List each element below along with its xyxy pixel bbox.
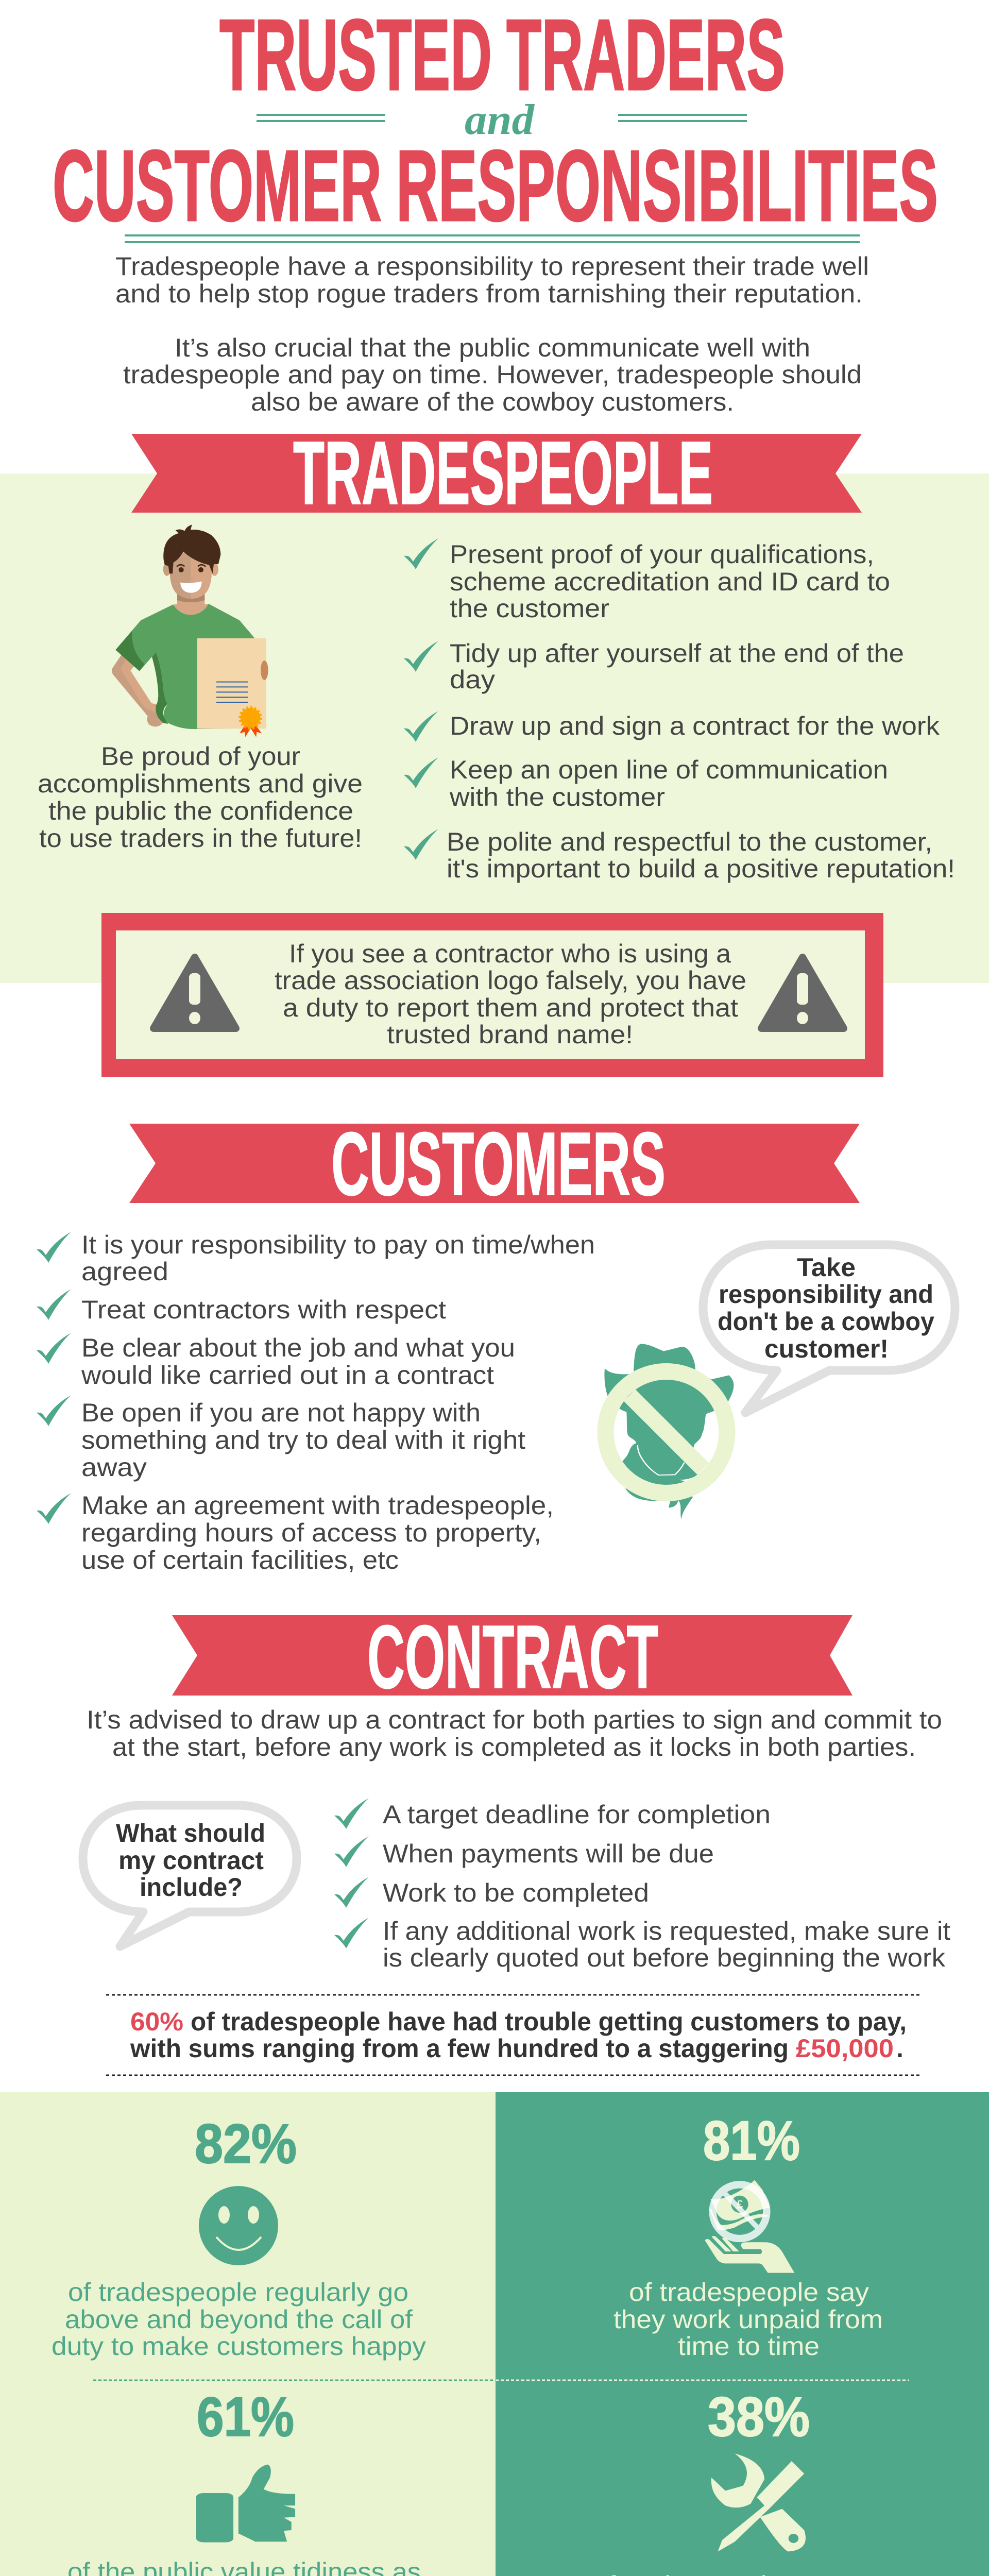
checklist: contract contents: If any additional work is requested, make sure it <box>383 1917 950 1945</box>
checklist: tradespeople duties: Be polite and respectful to the customer, <box>447 827 932 856</box>
checklist: customer responsibilities: would like carried out in a contract <box>81 1361 494 1389</box>
speech bubble: take responsibility: customer! <box>764 1334 889 1363</box>
banner: contract: CONTRACT <box>367 1606 658 1707</box>
icon: tradesman holding certificate <box>112 524 268 737</box>
callout: 60% payment statistic <box>130 2007 907 2063</box>
checklist: customer responsibilities: Treat contractors with respect <box>81 1295 446 1324</box>
intro text: Tradespeople have a responsibility to represent their trade well <box>115 252 869 281</box>
title: TRUSTED <box>219 0 492 111</box>
banner: contract <box>172 1606 852 1707</box>
stat: 38%: 38% <box>708 2385 810 2448</box>
intro text: It’s also crucial that the public communicate well with <box>175 333 810 362</box>
stat: 82%: 82% <box>195 2112 297 2175</box>
stat: 81%: 81% <box>703 2109 800 2172</box>
title: CUSTOMER <box>53 129 382 242</box>
checklist: contract contents: A target deadline for completion <box>383 1800 771 1829</box>
icon: crossed-out cowboy <box>604 1344 734 1519</box>
stat: 81%: they work unpaid from <box>613 2305 883 2334</box>
stat: 82%: duty to make customers happy <box>52 2332 426 2361</box>
speech bubble: what should my contract include: What should <box>116 1819 265 1848</box>
callout: report false logos <box>101 913 883 1077</box>
text: be proud caption: accomplishments and give <box>38 769 363 798</box>
banner: tradespeople <box>131 422 862 523</box>
title: TRADERS <box>506 0 785 111</box>
text: be proud caption: to use traders in the future! <box>39 824 362 853</box>
banner: customers <box>129 1113 860 1214</box>
callout: 60% payment statistic: £50,000 <box>796 2034 894 2063</box>
stat: 81% <box>613 2109 883 2361</box>
banner: customers: CUSTOMERS <box>331 1113 666 1214</box>
stat: 81%: time to time <box>678 2332 820 2361</box>
icon: warning triangle right <box>761 957 844 1028</box>
icon: warning triangle left <box>154 957 236 1028</box>
checklist: tradespeople duties: Present proof of your qualifications, <box>450 540 874 569</box>
icon: wrench and screwdriver <box>711 2453 806 2551</box>
checklist: customer responsibilities: away <box>81 1453 147 1482</box>
intro text: and to help stop rogue traders from tarnishing their reputation. <box>115 279 863 308</box>
stat: 38% <box>568 2385 935 2576</box>
callout: 60% payment statistic: . <box>896 2034 903 2063</box>
callout: 60% payment statistic: with sums ranging from a few hundred to a staggering <box>130 2034 789 2063</box>
stat: 81%: of tradespeople say <box>629 2278 869 2307</box>
panel: tradespeople background <box>0 473 989 983</box>
speech bubble: take responsibility: Take <box>797 1253 856 1282</box>
checklist: customer responsibilities: It is your responsibility to pay on time/when <box>81 1230 595 1259</box>
panel: right statistics column <box>496 2092 989 2576</box>
panel: left statistics column <box>0 2092 496 2576</box>
title <box>53 0 938 243</box>
icon: smiley <box>199 2186 278 2265</box>
text: be proud caption <box>38 742 363 853</box>
intro text <box>115 252 869 416</box>
checklist: tradespeople duties: day <box>450 665 495 694</box>
checklist: customer responsibilities <box>37 1230 595 1574</box>
checklist: customer responsibilities: use of certain facilities, etc <box>81 1546 399 1574</box>
checklist: tradespeople duties <box>404 538 955 883</box>
checklist: tradespeople duties: with the customer <box>449 783 665 811</box>
checklist: tradespeople duties: Tidy up after yourself at the end of the <box>450 639 904 668</box>
stat: 82%: above and beyond the call of <box>65 2305 413 2334</box>
checklist: customer responsibilities: Make an agreement with tradespeople, <box>81 1491 554 1520</box>
checklist: tradespeople duties: scheme accreditation and ID card to <box>450 567 890 596</box>
callout: report false logos: trade association logo falsely, you have <box>275 966 746 995</box>
callout: report false logos: If you see a contractor who is using a <box>289 939 731 968</box>
speech bubble: what should my contract include: include? <box>140 1873 243 1902</box>
checklist: customer responsibilities: agreed <box>81 1257 168 1286</box>
text: contract advice <box>87 1705 942 1761</box>
checklist: contract contents: When payments will be due <box>383 1839 714 1868</box>
speech bubble: what should my contract include <box>83 1805 297 1946</box>
text: contract advice: It’s advised to draw up a contract for both parties to sign and commit to <box>87 1705 942 1734</box>
icon: hand holding crossed-out money: £ <box>737 2198 743 2211</box>
callout: report false logos: trusted brand name! <box>387 1020 633 1049</box>
checklist: customer responsibilities: regarding hours of access to property, <box>81 1518 541 1547</box>
checklist: customer responsibilities: something and try to deal with it right <box>81 1426 525 1454</box>
speech bubble: take responsibility: responsibility and <box>719 1280 933 1309</box>
checklist: customer responsibilities: Be open if you are not happy with <box>81 1398 481 1427</box>
checklist: contract contents <box>334 1798 950 1972</box>
checklist: tradespeople duties: the customer <box>450 594 609 623</box>
stat: 61% <box>67 2385 421 2576</box>
intro text: also be aware of the cowboy customers. <box>251 387 734 416</box>
title: and <box>465 96 535 144</box>
callout: 60% payment statistic: 60% <box>130 2007 183 2036</box>
intro text: tradespeople and pay on time. However, tradespeople should <box>123 360 862 389</box>
speech bubble: what should my contract include: my contract <box>118 1846 264 1875</box>
checklist: tradespeople duties: Draw up and sign a contract for the work <box>450 711 940 740</box>
checklist: contract contents: Work to be completed <box>383 1878 649 1907</box>
checklist: tradespeople duties: it's important to build a positive reputation! <box>447 854 955 883</box>
speech bubble: take responsibility <box>703 1245 955 1413</box>
callout: report false logos: a duty to report them and protect that <box>283 993 738 1022</box>
checklist: contract contents: is clearly quoted out before beginning the work <box>383 1943 946 1972</box>
icon: thumbs up <box>196 2464 295 2543</box>
speech bubble: take responsibility: don't be a cowboy <box>718 1307 934 1336</box>
stat: 82%: of tradespeople regularly go <box>68 2278 408 2307</box>
stat: 82% <box>52 2112 426 2361</box>
checklist: customer responsibilities: Be clear about the job and what you <box>81 1333 515 1362</box>
text: contract advice: at the start, before any work is completed as it locks in both parties. <box>112 1733 916 1761</box>
icon: hand holding crossed-out money <box>705 2180 794 2273</box>
stat: 61%: 61% <box>197 2385 294 2448</box>
text: be proud caption: Be proud of your <box>101 742 300 771</box>
checklist: tradespeople duties: Keep an open line of communication <box>450 755 888 784</box>
text: be proud caption: the public the confidence <box>48 796 353 825</box>
callout: 60% payment statistic: of tradespeople have had trouble getting customers to pay, <box>191 2007 907 2036</box>
